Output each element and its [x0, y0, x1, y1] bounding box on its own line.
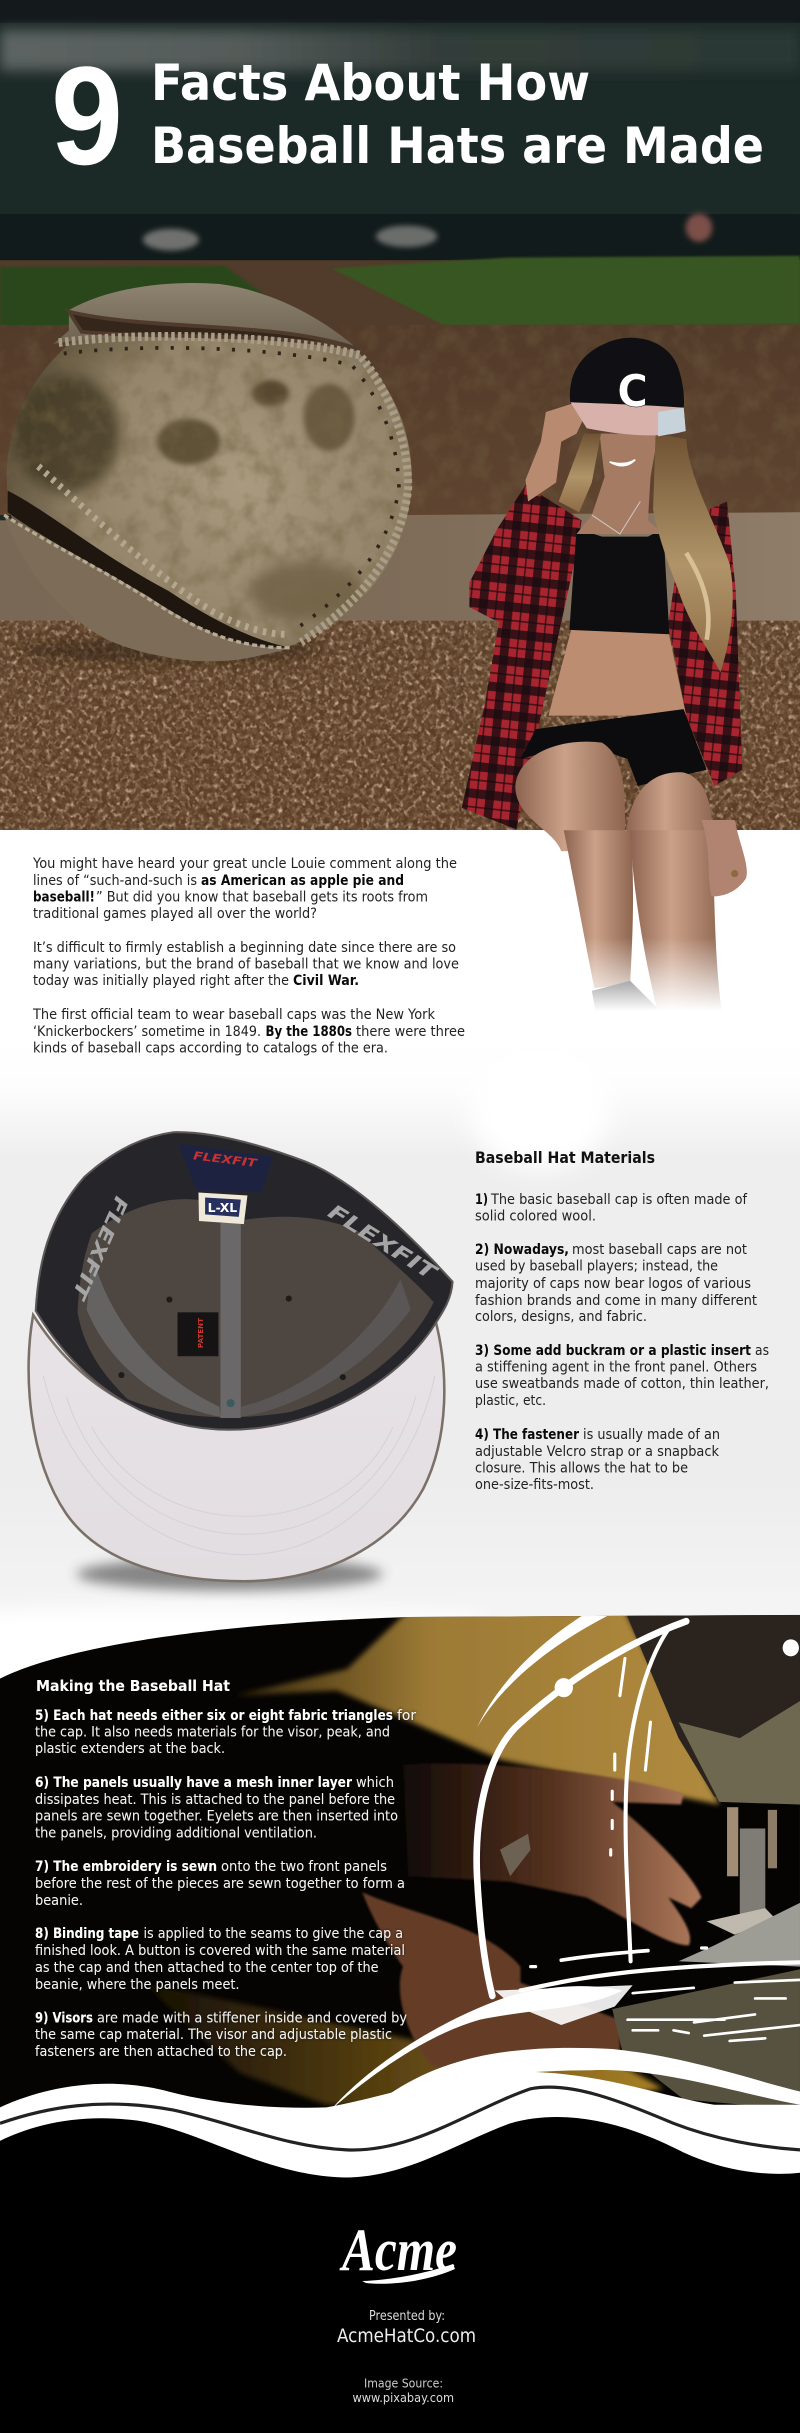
- text block: making the baseball hat: the cap. It also needs materials for the visor, peak, and: [35, 1725, 390, 1741]
- text block: introduction: ‘Knickerbockers’ sometime in 1849.: [33, 1024, 261, 1040]
- text block: baseball hat materials: The basic baseball cap is often made of: [490, 1192, 748, 1208]
- text block: making the baseball hat: finished look. A button is covered with the same material: [35, 1943, 405, 1959]
- text block: making the baseball hat: 9) Visors: [35, 2010, 93, 2026]
- top shell of ball: [54, 283, 360, 351]
- text block: making the baseball hat: 6) The panels usually have a mesh inner layer: [35, 1775, 352, 1791]
- cap crown rim: [36, 1132, 453, 1430]
- text block: baseball hat materials: adjustable Velcro strap or a snapback: [475, 1444, 720, 1460]
- text block: introduction: traditional games played all over the world?: [33, 906, 317, 922]
- baseball: [4, 282, 418, 672]
- hair: [653, 434, 733, 672]
- label: size tag: [198, 1192, 247, 1224]
- text block: making the baseball hat: before the rest of the pieces are sewn together to form a: [35, 1876, 405, 1892]
- text block: baseball hat materials: [475, 1148, 769, 1493]
- text block: baseball hat materials: plastic, etc.: [475, 1393, 546, 1409]
- shorts: [520, 709, 707, 786]
- text on band: flexfit left: FLEXFIT: [66, 1193, 133, 1305]
- title: Facts About How: [151, 54, 590, 112]
- label: size tag: L-XL: [208, 1201, 237, 1215]
- logo: Acme: Acme: [339, 2217, 457, 2283]
- text block: making the baseball hat: which: [356, 1775, 394, 1791]
- text block: making the baseball hat: 8) Binding tape: [35, 1926, 139, 1942]
- text block: introduction: You might have heard your great uncle Louie comment along the: [32, 856, 457, 872]
- text block: baseball hat materials: 1): [475, 1192, 488, 1208]
- text block: baseball hat materials: one-size-fits-most.: [475, 1477, 594, 1493]
- wave divider: [0, 2072, 800, 2190]
- text block: making the baseball hat: beanie.: [35, 1893, 83, 1909]
- text block: baseball hat materials: as: [755, 1343, 769, 1359]
- label: flexfit: FLEXFIT: [192, 1149, 259, 1170]
- title: Baseball Hats are Made: [151, 117, 764, 175]
- shirt: [462, 485, 582, 829]
- sewing machine: [625, 1611, 800, 1805]
- text: presented by: AcmeHatCo.com: [337, 2325, 476, 2347]
- text block: introduction: lines of “such-and-such is: [33, 873, 197, 889]
- hands: [403, 1763, 702, 1945]
- text: image source: [352, 2376, 454, 2405]
- text block: introduction: today was initially played right after the: [33, 973, 289, 989]
- panel: hero baseball field photo: [0, 0, 800, 851]
- text: presented by: [337, 2309, 476, 2347]
- text block: making the baseball hat: panels are sewn together. Eyelets are then inserted into: [35, 1808, 398, 1824]
- text: presented by: Presented by:: [369, 2309, 445, 2324]
- text block: making the baseball hat: onto the two front panels: [221, 1859, 387, 1875]
- panel: footer black background: [0, 2080, 800, 2433]
- panel: sewing machine photo: [0, 1600, 800, 2131]
- label: patent tag: PATENT: [196, 1318, 205, 1348]
- heading: making: Making the Baseball Hat: [36, 1677, 231, 1695]
- text block: making the baseball hat: 5) Each hat needs either six or eight fabric triangles: [35, 1708, 393, 1724]
- text block: making the baseball hat: beanie, where the panels meet.: [35, 1977, 240, 1993]
- text block: introduction: By the 1880s: [266, 1024, 352, 1040]
- illustration: woman with baseball cap: C: [617, 366, 648, 418]
- cap visor: [29, 1315, 444, 1581]
- text block: making the baseball hat: the panels, providing additional ventilation.: [35, 1826, 317, 1842]
- text block: introduction: many variations, but the brand of baseball that we know and love: [33, 956, 459, 972]
- text block: baseball hat materials: use sweatbands made of cotton, thin leather,: [475, 1376, 769, 1392]
- arm and hand: [526, 404, 584, 501]
- stadium and field background: [0, 0, 800, 851]
- text block: making the baseball hat: 7) The embroidery is sewn: [35, 1859, 217, 1875]
- text block: introduction: as American as apple pie and: [201, 873, 404, 889]
- text block: making the baseball hat: plastic extenders at the back.: [35, 1741, 225, 1757]
- text block: making the baseball hat: [35, 1677, 416, 2060]
- text block: introduction: [32, 856, 465, 1057]
- illustration: flexfit cap underside: [29, 1132, 453, 1590]
- text block: making the baseball hat: for: [397, 1708, 416, 1724]
- white splash outline: [477, 1621, 800, 2041]
- text block: introduction: It’s difficult to firmly establish a beginning date since there are so: [33, 940, 456, 956]
- text block: baseball hat materials: is usually made of an: [583, 1427, 720, 1443]
- text block: baseball hat materials: fashion brands and come in many different: [475, 1293, 757, 1309]
- text block: baseball hat materials: colors, designs, and fabric.: [475, 1309, 647, 1325]
- text block: baseball hat materials: closure. This allows the hat to be: [475, 1460, 688, 1476]
- text block: introduction: The first official team to wear baseball caps was the New York: [32, 1007, 436, 1023]
- text block: introduction: baseball!: [33, 890, 95, 906]
- text block: making the baseball hat: is applied to the seams to give the cap a: [144, 1926, 403, 1942]
- text: image source: www.pixabay.com: [352, 2390, 454, 2405]
- cap interior: [78, 1199, 434, 1417]
- illustration: woman with baseball cap: [462, 338, 747, 1024]
- text block: baseball hat materials: majority of caps now bear logos of various: [475, 1276, 751, 1292]
- label: patent tag: [178, 1312, 218, 1356]
- text block: introduction: ” But did you know that baseball gets its roots from: [96, 890, 428, 906]
- text on band: flexfit right: FLEXFIT: [324, 1199, 443, 1286]
- fabric: [235, 1611, 719, 1805]
- text block: introduction: Civil War.: [293, 973, 359, 989]
- text block: making the baseball hat: as the cap and then attached to the center top of the: [35, 1960, 378, 1976]
- title: 9: [51, 37, 123, 194]
- heading: materials: Baseball Hat Materials: [475, 1148, 655, 1167]
- text block: introduction: kinds of baseball caps according to catalogs of the era.: [33, 1041, 388, 1057]
- text block: baseball hat materials: 3) Some add buckram or a plastic insert: [475, 1343, 751, 1359]
- title: [56, 62, 762, 166]
- text block: making the baseball hat: the same cap material. The visor and adjustable plastic: [35, 2027, 392, 2043]
- label: flexfit: [179, 1144, 273, 1192]
- text: image source: Image Source:: [364, 2376, 443, 2390]
- text block: baseball hat materials: most baseball caps are not: [572, 1242, 747, 1258]
- text block: baseball hat materials: solid colored wool.: [475, 1208, 596, 1224]
- text block: making the baseball hat: fasteners are then attached to the cap.: [35, 2044, 287, 2060]
- panel: gray cap background: [0, 830, 800, 1720]
- text block: making the baseball hat: are made with a stiffener inside and covered by: [97, 2010, 407, 2026]
- text block: baseball hat materials: a stiffening agent in the front panel. Others: [475, 1360, 757, 1376]
- text block: baseball hat materials: used by baseball players; instead, the: [475, 1258, 718, 1274]
- text block: baseball hat materials: 2) Nowadays,: [475, 1242, 569, 1258]
- text block: making the baseball hat: dissipates heat. This is attached to the panel before the: [35, 1792, 395, 1808]
- cap on woman: [570, 338, 684, 409]
- text block: baseball hat materials: 4) The fastener: [475, 1427, 579, 1443]
- text block: introduction: there were three: [356, 1024, 465, 1040]
